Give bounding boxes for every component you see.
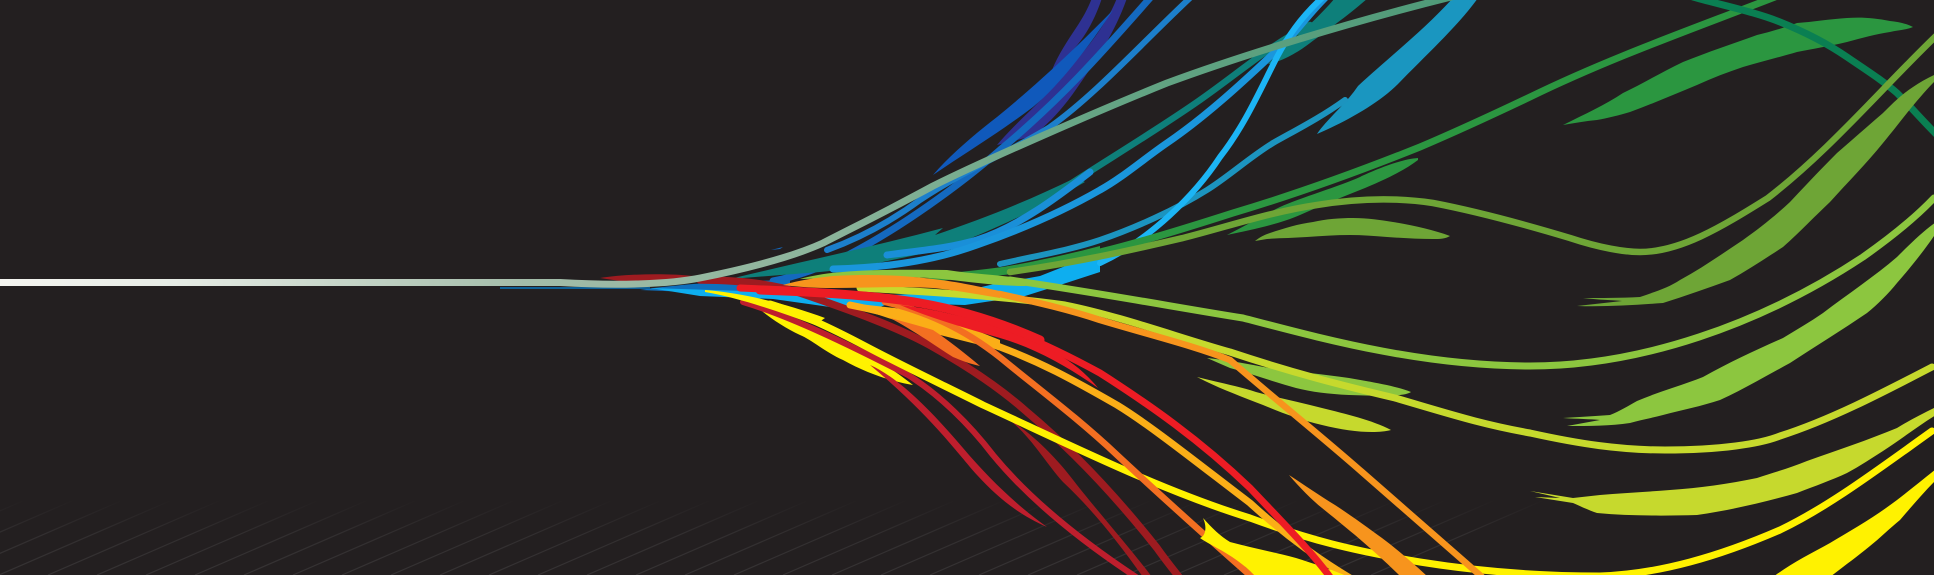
bright cyan line	[1100, 0, 1322, 263]
bright cyan band	[650, 258, 1100, 307]
diagonal floor lines	[0, 500, 1544, 575]
amber line	[850, 305, 1350, 575]
indigo brush one	[1052, 0, 1102, 70]
light green brush: right	[1563, 222, 1934, 426]
orange junction band	[783, 275, 1000, 298]
yellow brush: junction	[757, 307, 913, 385]
orange brush: bottom	[1289, 475, 1428, 575]
yellow-green brush: centre	[1197, 377, 1391, 432]
green brush: centre	[1227, 158, 1418, 235]
indigo brush two	[997, 0, 1127, 145]
teal line	[1040, 25, 1310, 204]
orange-red line	[885, 302, 1252, 575]
light green junction brush	[800, 270, 1033, 286]
orange short brush	[890, 318, 980, 366]
olive brush: centre	[1255, 218, 1450, 241]
crimson brush	[870, 365, 1047, 527]
sky blue line	[833, 0, 1325, 269]
red second strand	[900, 305, 1098, 388]
streams: yellows, reds and oranges	[600, 274, 1934, 575]
blue line two	[827, 0, 1190, 250]
streams: upper blues	[500, 0, 1478, 307]
sky blue middle strand	[887, 172, 1090, 255]
yellow-green brush: right	[1530, 407, 1934, 516]
teal-blue line	[1000, 100, 1345, 264]
green junction band	[900, 246, 1100, 281]
blue line one	[773, 0, 1150, 281]
thin blue strand under the white line	[500, 287, 650, 289]
red wide start	[760, 290, 1040, 340]
dark red sliver behind white line	[600, 274, 693, 281]
crimson line	[743, 302, 1136, 575]
olive line	[1010, 36, 1934, 272]
dark red brush	[1007, 418, 1152, 575]
teal-blue brush	[1317, 0, 1478, 134]
yellow brush: bottom right	[1773, 469, 1934, 575]
tiny blue fleck	[771, 247, 783, 250]
main white line fading into sage stream	[0, 0, 1455, 284]
streams: greens	[800, 0, 1934, 426]
light green brush: centre	[1207, 358, 1411, 396]
yellow brush: bottom	[1200, 518, 1349, 575]
bright yellow line	[770, 304, 1932, 575]
orange line	[1000, 294, 1482, 575]
teal brush at the top	[1268, 0, 1368, 64]
dark green arc	[1693, 0, 1934, 134]
blue brush	[933, 10, 1113, 175]
streams: yellow-greens	[860, 288, 1934, 516]
green brush: top right	[1563, 18, 1913, 125]
teal band at the junction	[730, 178, 1085, 279]
light green line	[1010, 198, 1934, 366]
yellow-green line	[860, 288, 1932, 450]
dark red line	[700, 280, 1179, 575]
red line	[740, 288, 1330, 575]
green line	[933, 0, 1775, 278]
blue band at the junction	[640, 280, 790, 292]
olive brush: right	[1577, 74, 1934, 306]
amber band at the junction	[850, 303, 1000, 350]
bright yellow line base	[705, 290, 825, 325]
